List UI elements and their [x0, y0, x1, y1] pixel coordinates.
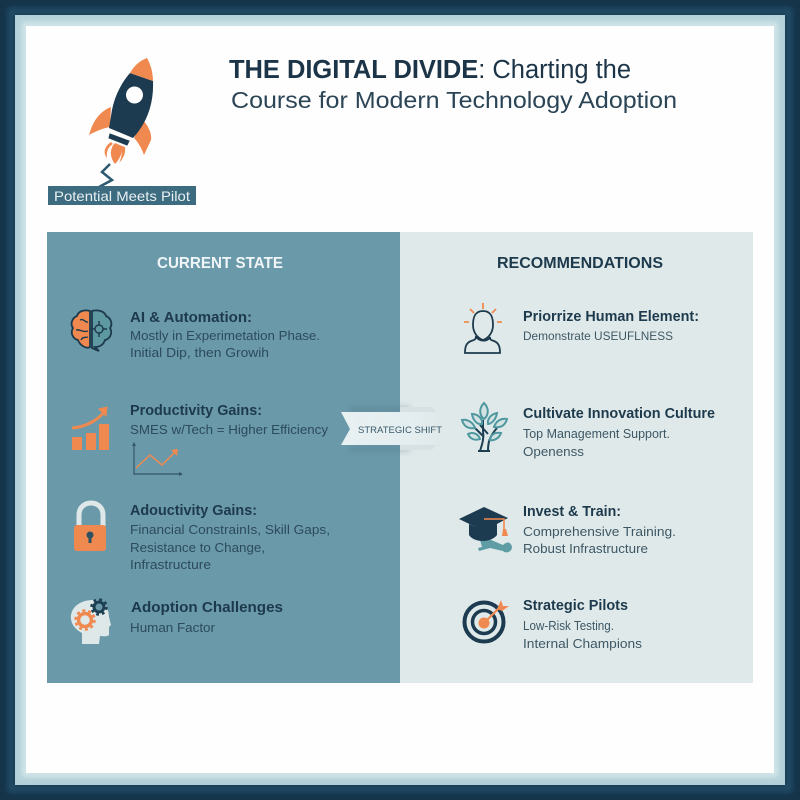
- icon: tree: [462, 403, 507, 451]
- icon: line chart: [132, 442, 183, 476]
- icon: target with dart: [464, 600, 509, 642]
- item: adoption challenges: Adoption Challenges: [131, 600, 283, 616]
- item: AI and automation: [72, 310, 320, 360]
- item: productivity gains: SMES w/Tech = Higher Efficiency: [130, 423, 329, 437]
- icon: graduation cap and wrench: [459, 507, 512, 552]
- ribbon band: [341, 412, 440, 445]
- item: innovation culture: Openenss: [523, 445, 584, 459]
- item: innovation culture: [462, 403, 715, 459]
- item: invest and train: [459, 504, 676, 556]
- item: invest and train: Invest & Train:: [523, 504, 621, 520]
- item: adouctivity gains: Financial ConstrainIs, Skill Gaps,: [130, 523, 330, 537]
- item: productivity gains: [72, 403, 329, 476]
- item: adouctivity gains: Resistance to Change,: [130, 541, 265, 555]
- item: invest and train: Robust Infrastructure: [523, 542, 648, 556]
- panel: current state: [47, 232, 400, 683]
- banner: Potential Meets Pilot: Potential Meets Pilot: [54, 188, 190, 204]
- item: human element: Priorrize Human Element:: [523, 309, 699, 325]
- item: strategic pilots: [464, 598, 642, 651]
- item: adouctivity gains: Infrastructure: [130, 558, 211, 572]
- item: productivity gains: Productivity Gains:: [130, 403, 262, 419]
- item: innovation culture: Cultivate Innovation Culture: [523, 406, 715, 422]
- icon: brain: [72, 310, 111, 351]
- logo: rocket with banner: [48, 58, 196, 205]
- ribbon label: STRATEGIC SHIFT: [358, 425, 442, 436]
- ribbon: strategic shift: [341, 406, 442, 452]
- icon: orange bar chart: [72, 407, 109, 450]
- icon: head with gears: [71, 600, 111, 644]
- item: invest and train: Comprehensive Training.: [523, 525, 676, 539]
- heading: recommendations: RECOMMENDATIONS: [497, 255, 663, 272]
- item: adouctivity gains: [74, 503, 330, 572]
- ribbon fold right: [400, 407, 436, 450]
- panel: recommendations: [400, 232, 753, 683]
- item: AI and automation: Mostly in Experimetation Phase.: [130, 329, 320, 343]
- panel background: recommendations: [400, 232, 753, 683]
- ribbon shadows: [350, 406, 410, 452]
- item: adouctivity gains: Adouctivity Gains:: [130, 503, 257, 519]
- icon: padlock: [74, 503, 106, 551]
- icon: rocket: [89, 58, 153, 187]
- item: human element: Demonstrate USEUFLNESS: [523, 329, 673, 343]
- panel background: current state: [47, 232, 400, 683]
- item: innovation culture: Top Management Support.: [523, 427, 670, 441]
- title: THE DIGITAL DIVIDE: Charting the: [229, 56, 631, 84]
- item: strategic pilots: Low-Risk Testing.: [523, 619, 614, 633]
- icon: person with light rays: [464, 303, 502, 353]
- title: [229, 56, 677, 113]
- item: adoption challenges: [71, 600, 283, 644]
- item: strategic pilots: Strategic Pilots: [523, 598, 628, 614]
- item: AI and automation: Initial Dip, then Growih: [130, 346, 269, 360]
- heading: current state: CURRENT STATE: [157, 255, 283, 272]
- item: strategic pilots: Internal Champions: [523, 637, 642, 651]
- item: adoption challenges: Human Factor: [130, 621, 215, 635]
- item: AI and automation: AI & Automation:: [130, 310, 252, 326]
- title: Course for Modern Technology Adoption: [231, 87, 677, 113]
- item: human element: [464, 303, 699, 353]
